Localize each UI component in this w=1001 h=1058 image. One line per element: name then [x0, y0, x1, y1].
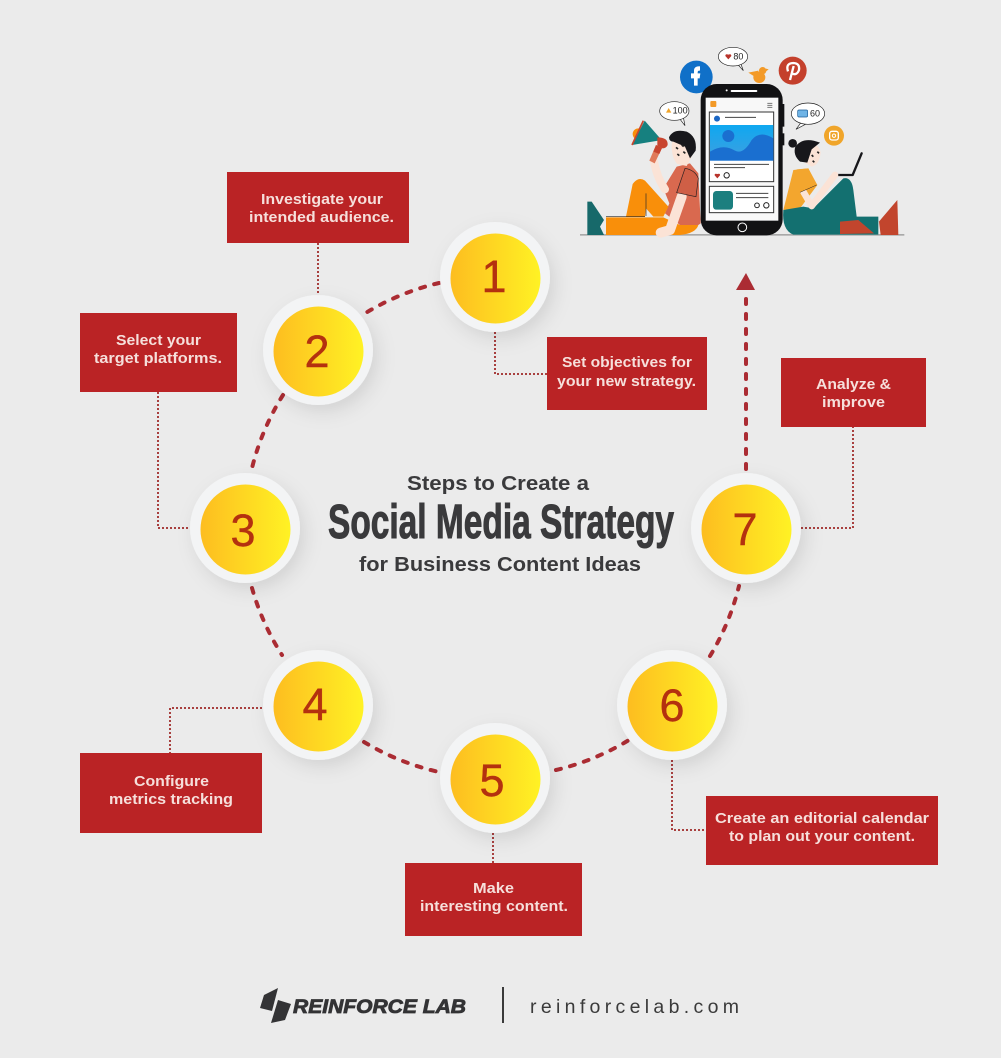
step 3 circle: 3 — [230, 505, 256, 556]
logo: Reinforce Lab: REINFORCE LAB — [293, 997, 466, 1018]
icon: bird — [748, 67, 769, 83]
step 5 circle — [440, 723, 550, 833]
panel: step 1 text: Set objectives for — [562, 355, 692, 371]
speech bubble: 80: 80 — [733, 51, 743, 61]
step 2 circle — [263, 295, 373, 405]
phone — [701, 84, 784, 235]
panel: step 3 text — [80, 313, 237, 392]
panel: step 6 text: to plan out your content. — [729, 829, 915, 845]
step 6 circle: 6 — [659, 680, 685, 731]
panel: step 5 text: interesting content. — [420, 899, 568, 915]
panel: step 6 text: Create an editorial calendar — [715, 811, 929, 827]
icon: pinterest — [779, 57, 807, 85]
icon: instagram — [824, 126, 844, 146]
panel: step 2 text — [227, 172, 409, 243]
dotted connectors from circles to boxes — [158, 243, 853, 863]
step 3 circle — [190, 473, 300, 583]
man with megaphone — [587, 121, 701, 235]
ground line — [580, 234, 904, 236]
panel: step 4 text: Configure — [134, 774, 209, 790]
icon: facebook — [680, 61, 713, 93]
title: Social Media Strategy — [328, 496, 674, 549]
dashed ring path connecting steps — [252, 283, 739, 772]
panel: step 5 text — [405, 863, 582, 936]
step 4 circle: 4 — [302, 679, 328, 730]
panel: step 3 text: target platforms. — [94, 351, 222, 367]
step 1 circle — [440, 222, 550, 332]
woman with laptop — [783, 139, 898, 235]
divider — [502, 987, 504, 1023]
speech bubble: 60: 60 — [810, 109, 820, 119]
step 5 circle: 5 — [479, 755, 505, 806]
panel: step 1 text: your new strategy. — [557, 374, 696, 390]
panel: step 7 text: Analyze & — [816, 377, 892, 393]
panel: step 7 text: improve — [822, 395, 885, 411]
panel: step 1 text — [547, 337, 707, 410]
step 6 circle — [617, 650, 727, 760]
logo: Reinforce Lab — [260, 988, 466, 1023]
panel: step 2 text: intended audience. — [249, 210, 394, 226]
step 2 circle: 2 — [304, 326, 330, 377]
step 1 circle: 1 — [481, 251, 507, 302]
arrow: up from step 7 to illustration — [736, 273, 755, 469]
speech bubble: 100: 100 — [673, 106, 688, 116]
title — [328, 473, 674, 576]
panel: step 3 text: Select your — [116, 333, 201, 349]
speech bubble: 100 — [660, 102, 689, 126]
illustration: people with phone and social icons — [580, 47, 904, 236]
panel: step 5 text: Make — [473, 881, 514, 897]
speech bubble: 80 — [718, 47, 748, 71]
step 7 circle: 7 — [732, 504, 758, 555]
panel: step 6 text — [706, 796, 938, 865]
website url: reinforcelab.com — [530, 996, 739, 1018]
panel: step 2 text: Investigate your — [261, 192, 383, 208]
panel: step 4 text — [80, 753, 262, 833]
step 4 circle — [263, 650, 373, 760]
title: Steps to Create a — [407, 473, 590, 495]
speech bubble: 60 — [791, 103, 825, 129]
panel: step 4 text: metrics tracking — [109, 792, 233, 808]
panel: step 7 text — [781, 358, 926, 427]
step 7 circle — [691, 473, 801, 583]
title: for Business Content Ideas — [359, 554, 641, 576]
